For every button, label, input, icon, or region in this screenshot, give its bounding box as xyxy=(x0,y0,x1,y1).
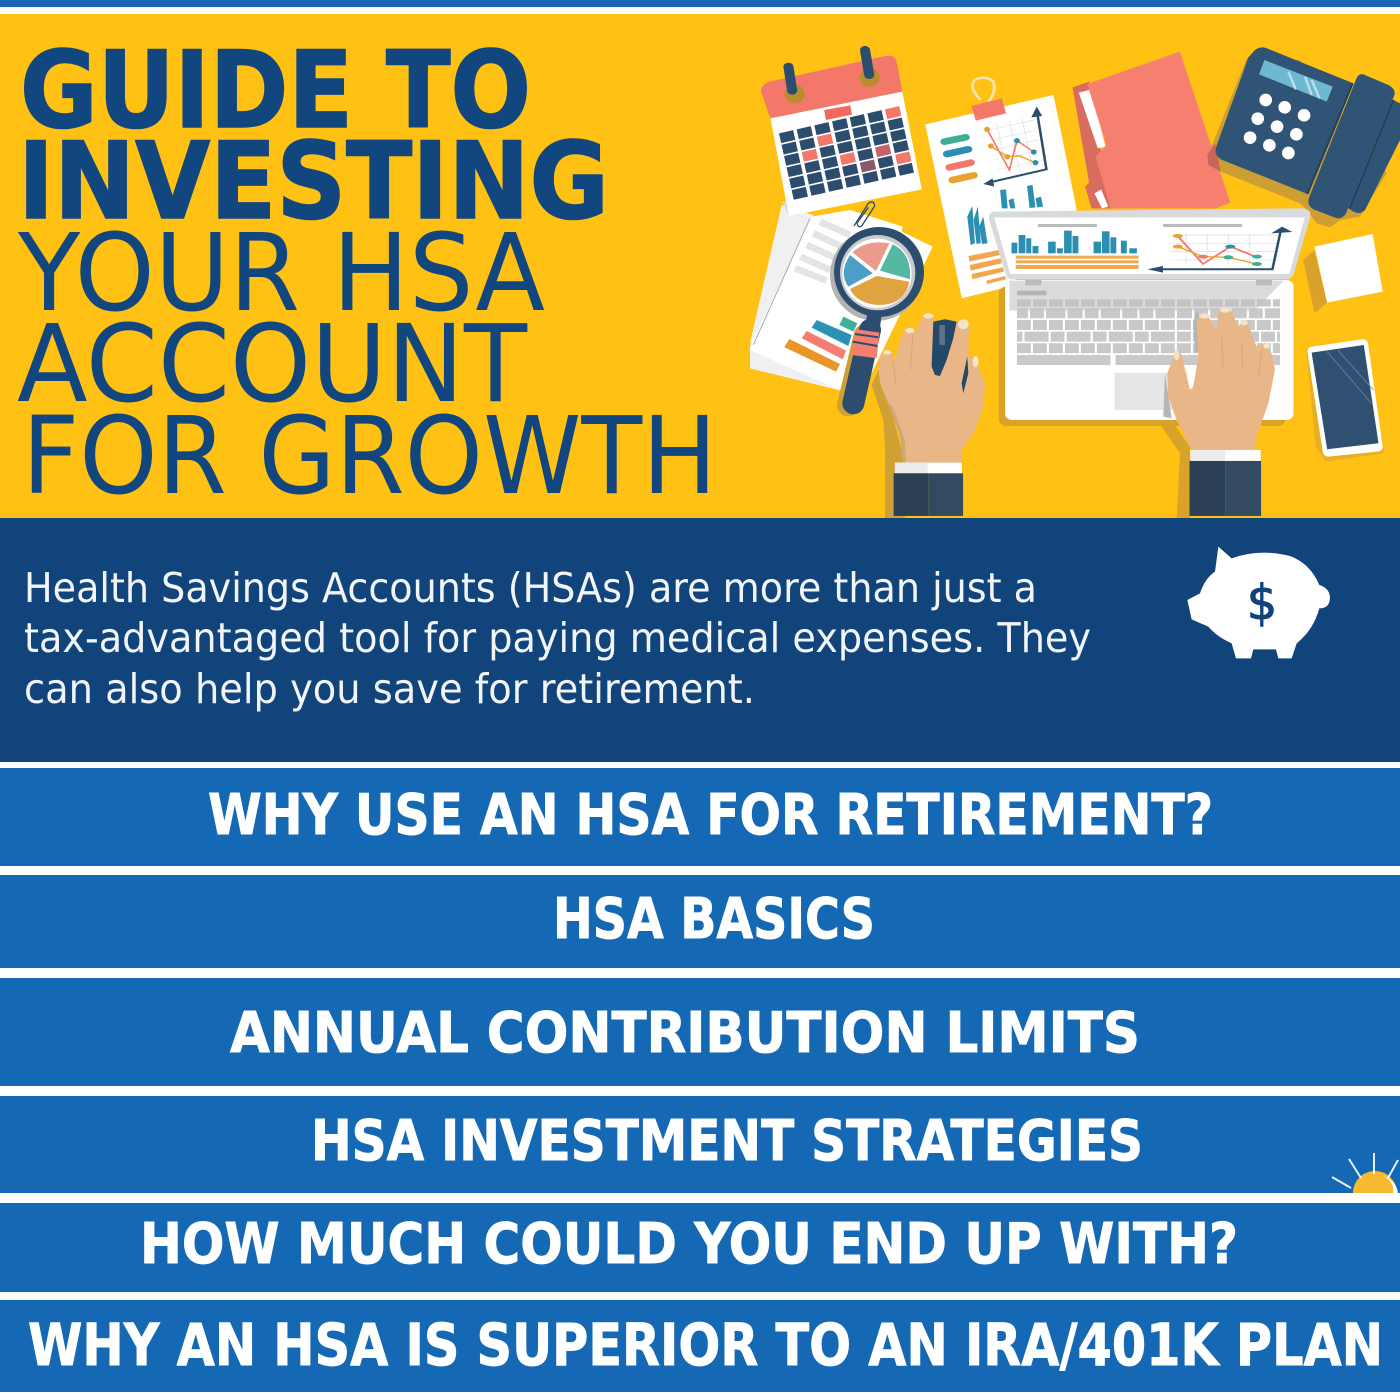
illustration: desk with laptop and office items xyxy=(750,47,1400,520)
icon: desk telephone xyxy=(1207,47,1400,227)
icon: piggy bank xyxy=(1187,547,1330,658)
panel: section bar 3 xyxy=(0,978,1400,1086)
icon: small smartphone xyxy=(1306,339,1384,462)
title: INVESTING xyxy=(18,120,609,243)
title xyxy=(17,29,717,519)
panel: section bar 2 xyxy=(0,875,1400,968)
panel: section bar 3: ANNUAL CONTRIBUTION LIMITS xyxy=(230,1001,1140,1066)
icon: papers under magnifier xyxy=(750,202,933,391)
text block: intro paragraph xyxy=(24,564,1091,713)
title: YOUR HSA xyxy=(17,212,545,336)
icon: right hand on keyboard xyxy=(1162,307,1275,520)
panel: section bar 4: HSA INVESTMENT STRATEGIES xyxy=(311,1109,1143,1174)
panel: intro navy band xyxy=(0,518,1400,762)
icon: right shirt cuff and sleeve xyxy=(1190,450,1261,516)
icon: red folder xyxy=(1073,52,1230,208)
panel: section bar 5: HOW MUCH COULD YOU END UP WITH? xyxy=(140,1212,1238,1277)
title: ACCOUNT xyxy=(17,303,528,427)
panel: section bar 4 xyxy=(0,1096,1400,1193)
icon: left hand on mouse xyxy=(872,313,985,520)
panel: section bar 5 xyxy=(0,1203,1400,1292)
panel: section bar 1: WHY USE AN HSA FOR RETIREMENT? xyxy=(208,783,1213,848)
panel: section bar 1 xyxy=(0,768,1400,866)
text block: intro paragraph: Health Savings Accounts (HSAs) are more than just a xyxy=(24,564,1037,612)
title: GUIDE TO xyxy=(20,29,531,152)
panel: yellow hero xyxy=(0,14,1400,520)
icon: calendar xyxy=(761,50,922,216)
icon: piggy bank: $ xyxy=(1247,575,1277,631)
icon: sticky note block xyxy=(1303,234,1383,313)
title: FOR GROWTH xyxy=(22,395,717,519)
icon: chart document xyxy=(925,78,1077,298)
panel: section bar 2: HSA BASICS xyxy=(553,887,875,952)
icon: laptop xyxy=(989,208,1310,426)
icon: magnifying glass xyxy=(830,227,924,405)
icon: rising sun xyxy=(1332,1153,1398,1193)
text block: intro paragraph: can also help you save for retirement. xyxy=(24,665,755,713)
text block: intro paragraph: tax-advantaged tool for paying medical expenses. They xyxy=(24,614,1091,662)
icon: left shirt cuff and sleeve xyxy=(894,463,963,516)
